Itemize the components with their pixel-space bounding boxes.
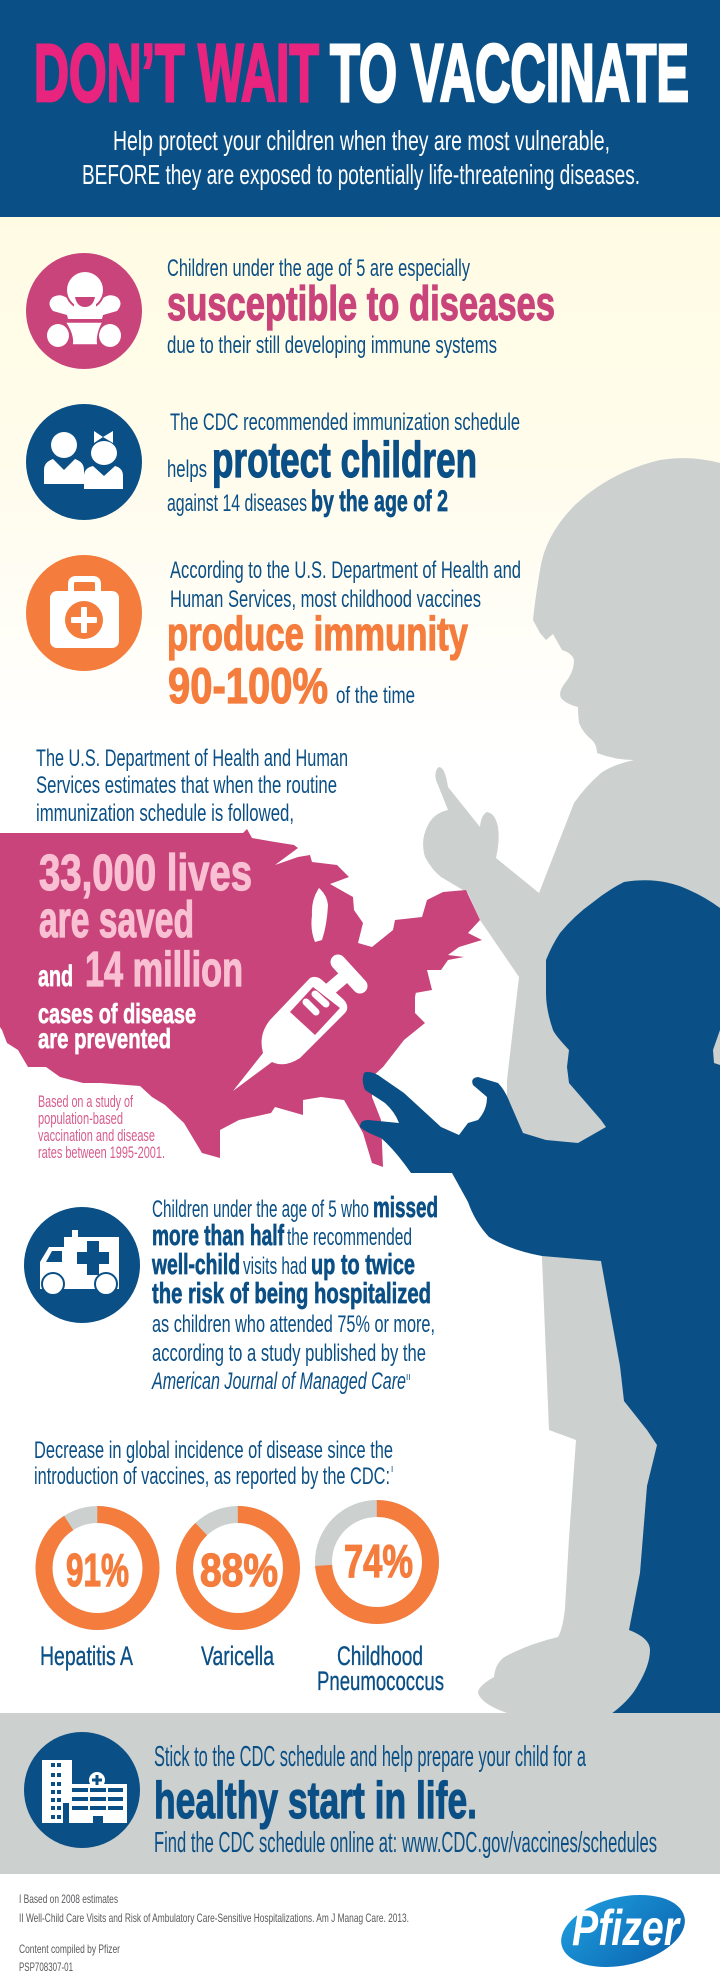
- text block: missed well-child visits: missed: [373, 1192, 438, 1224]
- text block: protect children: The CDC recommended immunization schedule: [170, 409, 520, 436]
- panel: call to action band: [0, 1713, 720, 1874]
- text block: produce immunity: 90-100%: [168, 658, 328, 714]
- chart: Varicella donut 88%: Varicella: [201, 1641, 275, 1671]
- text block: susceptible to diseases: due to their still developing immune systems: [167, 332, 497, 359]
- text block: lives saved on map: 14 million: [85, 943, 243, 997]
- text block: HHS estimate: Services estimates that when the routine: [36, 772, 337, 799]
- text block: study note: rates between 1995-2001.: [38, 1143, 165, 1162]
- text block: lives saved on map: 33,000 lives: [39, 844, 252, 901]
- logo: Pfizer: Pfizer: [572, 1900, 681, 1956]
- chart: Varicella donut 88%: [184, 1514, 292, 1671]
- footnotes: [19, 1892, 409, 1974]
- text block: missed well-child visits: well-child: [151, 1249, 240, 1281]
- text block: missed well-child visits: Children under the age of 5 who: [152, 1196, 369, 1223]
- text block: lives saved on map: and: [38, 960, 73, 993]
- chart: Childhood Pneumococcus donut 74%: Childhood: [337, 1641, 423, 1671]
- text block: protect children: against 14 diseases: [167, 490, 307, 517]
- text block: produce immunity: of the time: [336, 682, 415, 708]
- text block: missed well-child visits: II: [406, 1373, 410, 1382]
- text block: decrease in incidence heading: Decrease in global incidence of disease since the: [34, 1437, 393, 1464]
- panel: header: [0, 0, 720, 217]
- text block: susceptible to diseases: Children under the age of 5 are especially: [167, 255, 470, 282]
- text block: missed well-child visits: [151, 1192, 438, 1395]
- text block: protect children: helps: [167, 456, 207, 483]
- text block: HHS estimate: [36, 745, 348, 827]
- text block: study note: vaccination and disease: [38, 1126, 155, 1145]
- text block: protect children: protect children: [212, 432, 477, 488]
- text block: healthy start: healthy start in life.: [154, 1772, 477, 1830]
- text block: produce immunity: [167, 557, 521, 714]
- chart: Hepatitis A donut 91%: [40, 1514, 151, 1671]
- text block: decrease in incidence heading: I: [391, 1465, 393, 1474]
- chart: Varicella donut 88%: 88%: [200, 1544, 278, 1596]
- logo: Pfizer: [554, 1884, 692, 1975]
- silhouette: younger child in blue: [360, 880, 720, 1714]
- text block: susceptible to diseases: susceptible to diseases: [167, 278, 555, 331]
- text block: lives saved on map: [38, 844, 252, 1054]
- text block: missed well-child visits: up to twice: [311, 1249, 415, 1281]
- silhouette: grey hand sliver: [713, 1030, 720, 1065]
- text block: susceptible to diseases: [167, 255, 555, 359]
- text block: missed well-child visits: more than half: [152, 1220, 284, 1252]
- text block: produce immunity: produce immunity: [167, 607, 468, 660]
- text block: decrease in incidence heading: [34, 1437, 393, 1490]
- chart: Childhood Pneumococcus donut 74%: [317, 1508, 444, 1696]
- chart: Childhood Pneumococcus donut 74%: 74%: [344, 1535, 413, 1587]
- text block: missed well-child visits: as children who attended 75% or more,: [152, 1311, 435, 1338]
- text block: study note: Based on a study of: [38, 1092, 133, 1111]
- map of the United States: [0, 829, 482, 1167]
- text block: lives saved on map: are prevented: [38, 1023, 171, 1054]
- chart: Hepatitis A donut 91%: Hepatitis A: [40, 1641, 133, 1671]
- text block: produce immunity: Human Services, most childhood vaccines: [170, 586, 481, 613]
- text block: study note: population-based: [38, 1109, 123, 1128]
- silhouette: older child in grey: [423, 458, 720, 1714]
- icon: medical kit: [26, 555, 142, 671]
- icon: ambulance: [24, 1207, 140, 1323]
- text block: healthy start: [154, 1741, 657, 1859]
- text block: missed well-child visits: American Journal of Managed Care: [151, 1368, 406, 1395]
- icon: baby: [26, 253, 142, 369]
- title: DON’T WAIT: [34, 28, 319, 119]
- icon: syringe: [233, 962, 360, 1091]
- text block: decrease in incidence heading: introduction of vaccines, as reported by the CDC:: [34, 1463, 390, 1490]
- text block: HHS estimate: immunization schedule is followed,: [36, 800, 294, 827]
- subtitle: [82, 125, 640, 190]
- footnotes: Content compiled by Pfizer: [19, 1942, 120, 1956]
- text block: missed well-child visits: visits had: [243, 1253, 307, 1280]
- footnotes: I Based on 2008 estimates: [19, 1892, 118, 1906]
- chart: Childhood Pneumococcus donut 74%: Pneumococcus: [317, 1666, 444, 1696]
- text block: study note: [38, 1092, 165, 1162]
- chart: Hepatitis A donut 91%: 91%: [66, 1544, 129, 1596]
- footnotes: II Well-Child Care Visits and Risk of Ambulatory Care-Sensitive Hospitalizations. Am J Manag Care. 2013.: [19, 1911, 409, 1925]
- icon: two children: [26, 404, 142, 520]
- icon: hospital: [24, 1732, 140, 1848]
- text block: HHS estimate: The U.S. Department of Health and Human: [36, 745, 348, 772]
- text block: lives saved on map: cases of disease: [38, 998, 196, 1029]
- text block: produce immunity: According to the U.S. Department of Health and: [170, 557, 521, 584]
- footnotes: PSP708307-01: [19, 1960, 73, 1974]
- text block: protect children: [167, 409, 520, 518]
- text block: lives saved on map: are saved: [39, 891, 194, 948]
- text block: missed well-child visits: according to a study published by the: [152, 1340, 426, 1367]
- text block: missed well-child visits: the risk of being hospitalized: [152, 1278, 431, 1310]
- text block: missed well-child visits: the recommended: [287, 1224, 412, 1251]
- Great Lakes cut-out: [311, 888, 328, 942]
- text block: protect children: by the age of 2: [311, 485, 448, 518]
